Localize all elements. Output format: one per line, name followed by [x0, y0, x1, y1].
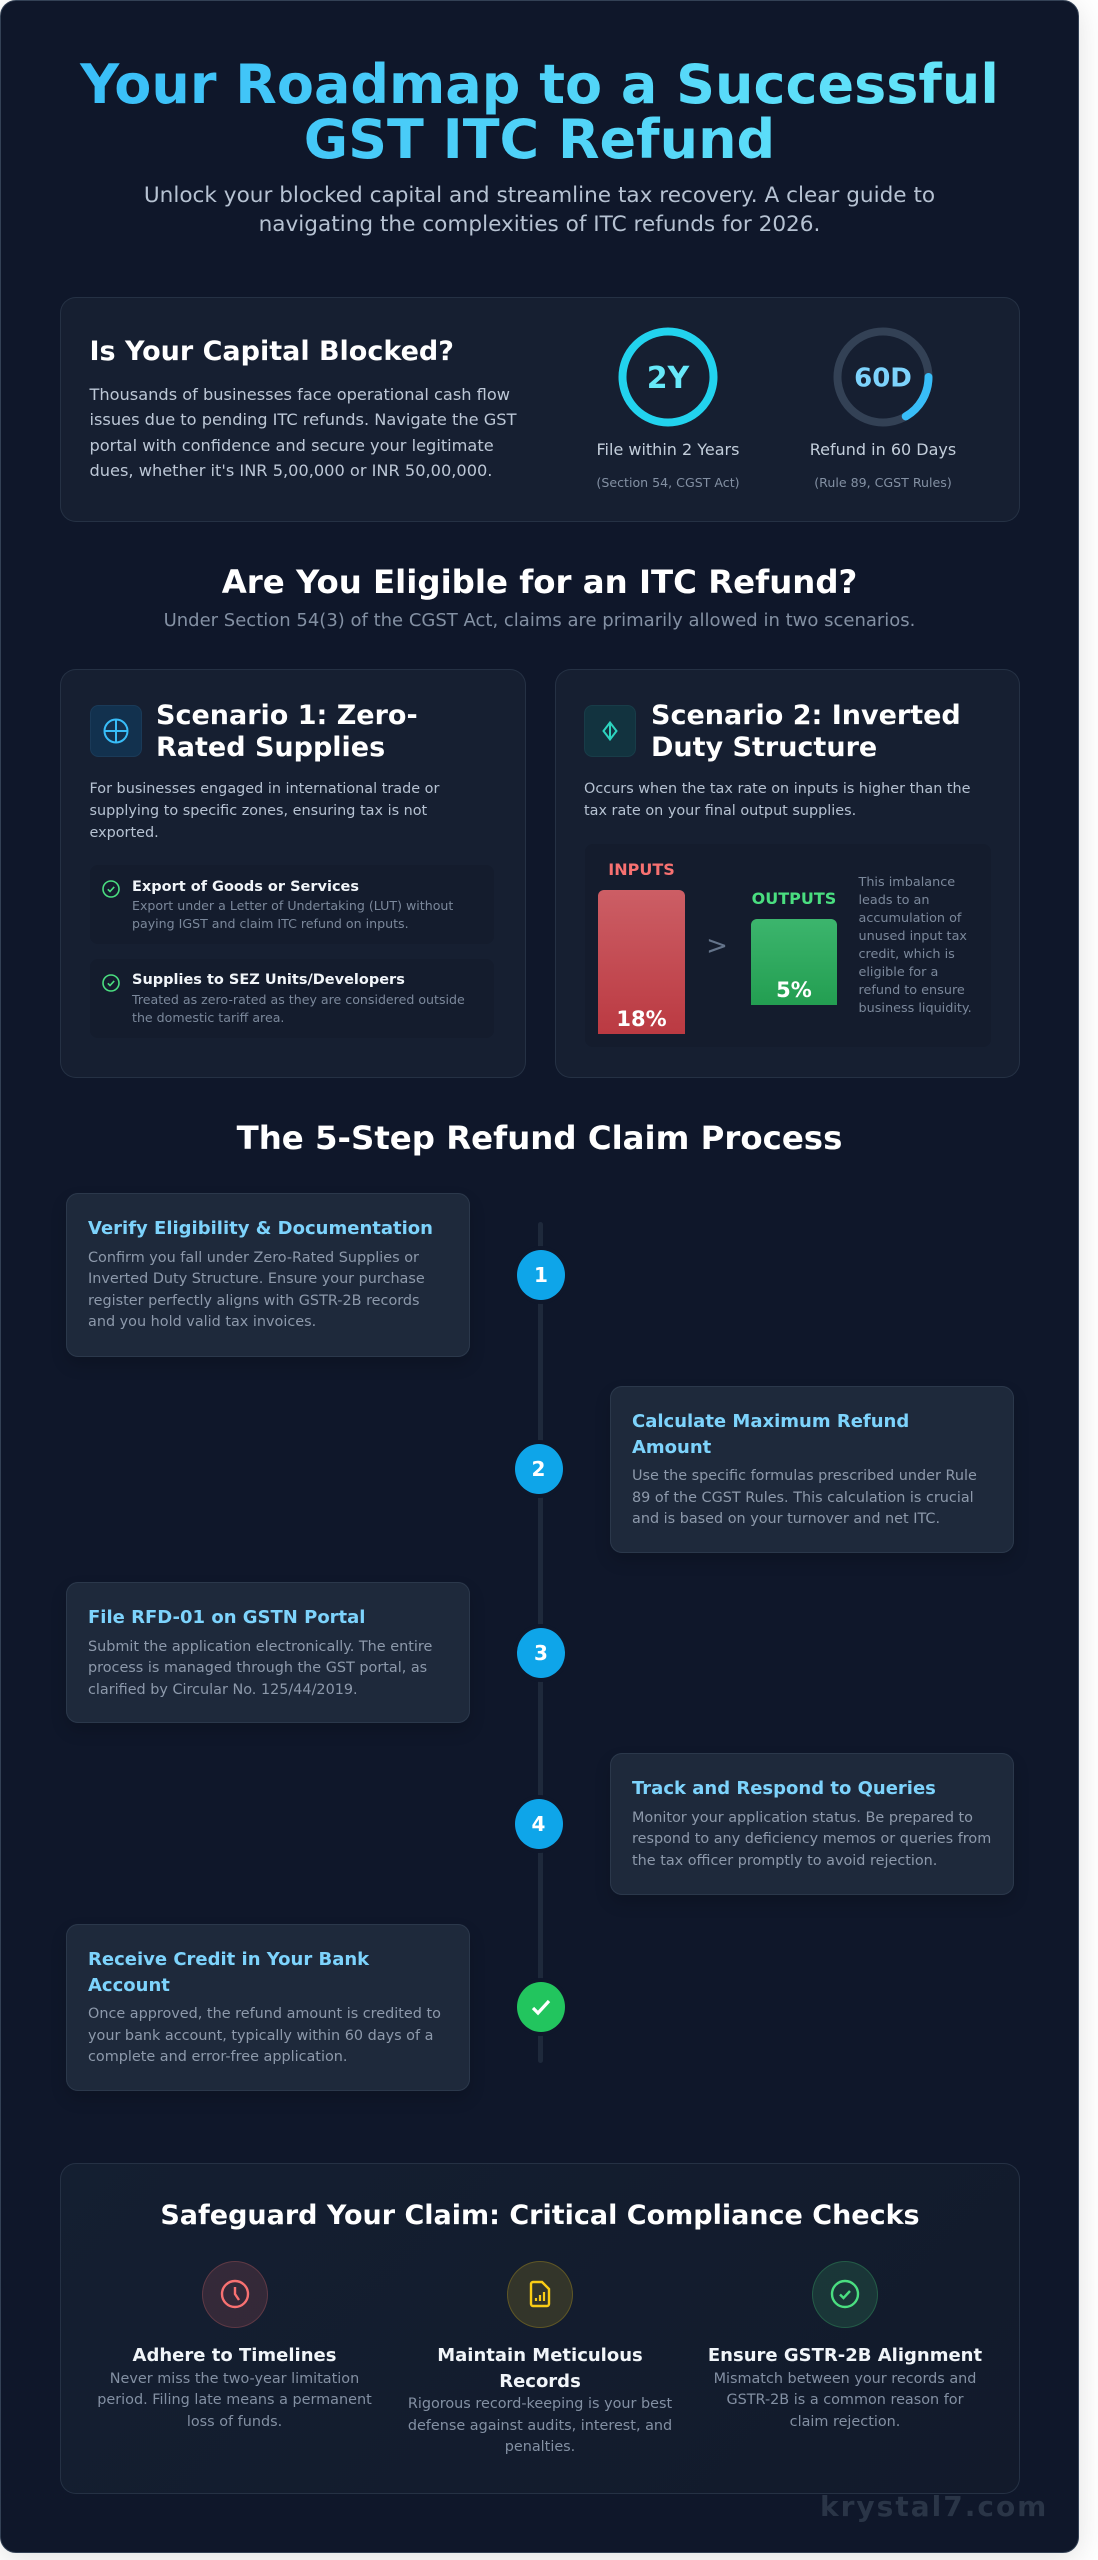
- step text: the tax officer promptly to avoid rejection.: [632, 1853, 937, 1869]
- subtitle: [144, 183, 935, 237]
- text: imbalance note: This imbalance: [858, 875, 955, 890]
- check text: Rigorous record-keeping is your best: [408, 2396, 672, 2412]
- step 5 card: [66, 1924, 470, 2091]
- text: capital blocked body: Thousands of businesses face operational cash flow: [90, 385, 510, 404]
- check title: Ensure GSTR-2B Alignment: [708, 2345, 982, 2366]
- step text: [88, 1639, 432, 1698]
- check text: penalties.: [505, 2439, 575, 2455]
- text: imbalance note: eligible for a: [858, 965, 938, 980]
- step text: and you hold valid tax invoices.: [88, 1314, 316, 1330]
- watermark: krystal7.com: [820, 2490, 1048, 2523]
- step text: [632, 1810, 991, 1869]
- chart: 2 year ring: [618, 328, 718, 426]
- heading: scenario 2: Scenario 2: Inverted: [651, 700, 961, 731]
- panel: is your capital blocked: [60, 297, 1020, 522]
- heading: capital blocked: Is Your Capital Blocked?: [90, 336, 454, 367]
- text: scenario 1 description: For businesses engaged in international trade or: [90, 781, 439, 797]
- icon: globe: [90, 705, 142, 757]
- step 4 card: [610, 1753, 1014, 1895]
- step text: your bank account, typically within 60 days of a: [88, 2028, 433, 2044]
- bar: inputs 18%: 18%: [616, 1007, 667, 1031]
- step title: Account: [88, 1975, 170, 1996]
- panel: scenario 2: [555, 669, 1020, 1078]
- step text: Once approved, the refund amount is credited to: [88, 2006, 441, 2022]
- step text: Confirm you fall under Zero-Rated Supplies or: [88, 1250, 419, 1266]
- step text: 89 of the CGST Rules. This calculation is crucial: [632, 1490, 974, 1506]
- check text: loss of funds.: [187, 2414, 282, 2430]
- item text: export: [132, 898, 453, 931]
- item text: SEZ: the domestic tariff area.: [132, 1010, 284, 1024]
- chart: inputs vs outputs: [585, 844, 991, 1047]
- item title: SEZ: Supplies to SEZ Units/Developers: [132, 972, 405, 988]
- text: imbalance note: accumulation of: [858, 911, 961, 926]
- step text: complete and error-free application.: [88, 2049, 347, 2065]
- heading: eligibility: Are You Eligible for an ITC Refund?: [222, 563, 857, 601]
- text: capital blocked body: portal with confidence and secure your legitimate: [90, 436, 494, 455]
- panel: scenario 1: [60, 669, 526, 1078]
- step text: respond to any deficiency memos or queries from: [632, 1831, 991, 1847]
- step 2 card: [610, 1386, 1014, 1553]
- step 1 node: [517, 1250, 565, 1300]
- panel: compliance checks: [60, 2163, 1020, 2494]
- step text: Inverted Duty Structure. Ensure your purchase: [88, 1271, 425, 1287]
- item text: export: Export under a Letter of Undertaking (LUT) without: [132, 898, 453, 913]
- item text: SEZ: Treated as zero-rated as they are considered outside: [132, 992, 465, 1006]
- step 1 node: 1: [534, 1263, 548, 1287]
- step 3 card: [66, 1582, 470, 1723]
- text: imbalance note: credit, which is: [858, 947, 955, 962]
- text: capital blocked body: [89, 385, 517, 480]
- step 3 node: [517, 1628, 565, 1678]
- label: outputs: OUTPUTS: [752, 889, 836, 908]
- step title: [88, 1949, 370, 1996]
- text: scenario 2 description: Occurs when the tax rate on inputs is higher than the: [584, 781, 971, 797]
- icon: check: [102, 974, 120, 992]
- check title: Adhere to Timelines: [133, 2345, 336, 2366]
- text: imbalance note: business liquidity.: [858, 1001, 972, 1016]
- text: scenario 1 description: supplying to specific zones, ensuring tax is not: [90, 803, 427, 819]
- icon: check circle: [812, 2261, 878, 2328]
- step title: Receive Credit in Your Bank: [88, 1949, 369, 1970]
- text: scenario 1 description: exported.: [90, 825, 159, 841]
- chart: 60 day ring: [834, 328, 932, 426]
- subheading: eligibility: Under Section 54(3) of the CGST Act, claims are primarily allowed in two scenarios.: [164, 610, 915, 631]
- step title: Amount: [632, 1437, 711, 1458]
- note: section 54: (Section 54, CGST Act): [596, 475, 740, 490]
- check text: Never miss the two-year limitation: [110, 2371, 359, 2387]
- check: GSTR-2B: [708, 2261, 982, 2430]
- icon: check: [102, 880, 120, 898]
- heading: scenario 2: Duty Structure: [651, 732, 877, 763]
- step title: Track and Respond to Queries: [632, 1778, 936, 1799]
- text: imbalance note: unused input tax: [858, 929, 967, 944]
- bar: outputs 5%: [751, 919, 837, 1005]
- check text: [408, 2396, 672, 2455]
- heading: scenario 1: Scenario 1: Zero-: [156, 700, 418, 731]
- check text: [714, 2371, 976, 2430]
- step text: process is managed through the GST portal, as: [88, 1660, 427, 1676]
- step text: register perfectly aligns with GSTR-2B records: [88, 1293, 420, 1309]
- step text: clarified by Circular No. 125/44/2019.: [88, 1682, 358, 1698]
- check: records: [408, 2261, 672, 2455]
- check text: claim rejection.: [790, 2414, 900, 2430]
- step title: File RFD-01 on GSTN Portal: [88, 1607, 365, 1628]
- text: imbalance note: refund to ensure: [858, 983, 965, 998]
- icon: clock: [202, 2261, 268, 2328]
- step text: [632, 1468, 977, 1527]
- title: GST ITC Refund: [304, 108, 775, 171]
- subtitle: Unlock your blocked capital and streamline tax recovery. A clear guide to: [144, 183, 935, 208]
- step text: Use the specific formulas prescribed under Rule: [632, 1468, 977, 1484]
- chart: 60 day ring: 60D: [854, 364, 912, 394]
- heading: scenario 1: [156, 700, 418, 763]
- step 4 node: 4: [532, 1812, 545, 1836]
- step text: Submit the application electronically. The entire: [88, 1639, 432, 1655]
- heading: compliance: Safeguard Your Claim: Critical Compliance Checks: [160, 2200, 920, 2231]
- text: scenario 1 description: [90, 781, 440, 841]
- check text: defense against audits, interest, and: [408, 2418, 672, 2434]
- step 1 card: [66, 1193, 470, 1357]
- label: file within 2 years: File within 2 Years: [597, 440, 739, 459]
- heading: scenario 1: Rated Supplies: [156, 732, 385, 763]
- step 4 node: [514, 1799, 562, 1849]
- check: timelines: [97, 2261, 372, 2430]
- chart: 2 year ring: 2Y: [647, 361, 691, 396]
- item title: export: Export of Goods or Services: [132, 878, 359, 894]
- step 2 node: [514, 1444, 562, 1494]
- list item: export of goods: [90, 865, 494, 944]
- text: imbalance note: [858, 875, 972, 1016]
- step title: Calculate Maximum Refund: [632, 1411, 909, 1432]
- step title: [632, 1411, 909, 1458]
- icon: document chart: [507, 2261, 573, 2328]
- timeline line: [538, 1222, 542, 2063]
- label: refund in 60 days: Refund in 60 Days: [810, 440, 956, 459]
- heading: process: The 5-Step Refund Claim Process: [237, 1119, 842, 1157]
- step text: [88, 1250, 425, 1330]
- symbol: greater than: >: [706, 931, 728, 961]
- text: imbalance note: leads to an: [858, 893, 930, 908]
- step text: and is based on your turnover and net ITC.: [632, 1511, 940, 1527]
- step title: Verify Eligibility & Documentation: [88, 1218, 433, 1239]
- check title: Records: [499, 2371, 581, 2392]
- item text: export: paying IGST and claim ITC refund on inputs.: [132, 916, 409, 931]
- subtitle: navigating the complexities of ITC refunds for 2026.: [259, 212, 820, 237]
- check text: period. Filing late means a permanent: [97, 2392, 372, 2408]
- text: capital blocked body: issues due to pending ITC refunds. Navigate the GST: [90, 410, 516, 429]
- step text: Monitor your application status. Be prepared to: [632, 1810, 973, 1826]
- check text: [97, 2371, 372, 2430]
- bar: inputs 18%: [598, 890, 685, 1034]
- text: scenario 2 description: [584, 781, 971, 819]
- step 3 node: 3: [534, 1641, 548, 1665]
- heading: scenario 2: [651, 700, 961, 763]
- title: Your Roadmap to a Successful: [80, 53, 999, 116]
- title: [60, 57, 1019, 167]
- step 5 node: check: [517, 1982, 565, 2032]
- list item: SEZ supplies: [90, 958, 494, 1038]
- item text: SEZ: [132, 992, 465, 1024]
- check text: Mismatch between your records and: [714, 2371, 976, 2387]
- text: scenario 2 description: tax rate on your final output supplies.: [584, 803, 856, 819]
- check title: Maintain Meticulous: [437, 2345, 643, 2366]
- step 2 node: 2: [532, 1457, 545, 1481]
- bar: outputs 5%: 5%: [776, 978, 812, 1002]
- check title: [437, 2345, 643, 2392]
- check text: GSTR-2B is a common reason for: [726, 2392, 964, 2408]
- icon: diamond: [584, 705, 636, 757]
- note: rule 89: (Rule 89, CGST Rules): [814, 475, 952, 490]
- text: capital blocked body: dues, whether it's INR 5,00,000 or INR 50,00,000.: [90, 461, 492, 480]
- step text: [88, 2006, 441, 2065]
- label: inputs: INPUTS: [608, 860, 675, 879]
